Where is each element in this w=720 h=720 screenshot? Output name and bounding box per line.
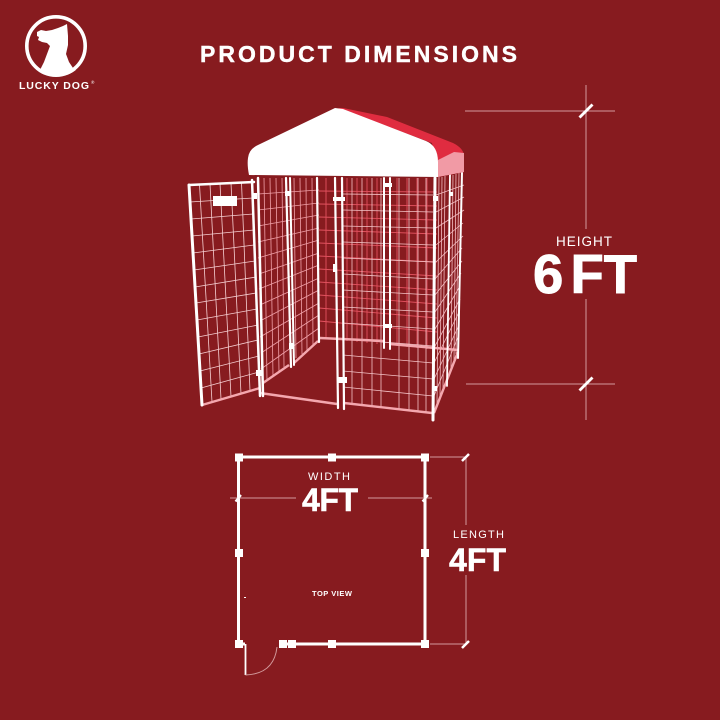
- width guide lines: [230, 497, 432, 499]
- open door mesh: [190, 182, 259, 402]
- width value: 4FT: [302, 482, 358, 518]
- back wall mesh: [319, 178, 437, 349]
- right wall mesh: [434, 173, 464, 405]
- canopy red side: [338, 108, 464, 177]
- title: PRODUCT DIMENSIONS: [200, 41, 517, 67]
- height tick marks: [580, 104, 592, 390]
- height dimension: [465, 85, 637, 420]
- width label: WIDTH: [308, 471, 350, 483]
- logo: Lucky Dog: [19, 17, 95, 92]
- length guide lines: [430, 457, 466, 644]
- canopy white front: [248, 108, 438, 177]
- product illustration: dog kennel: [189, 108, 464, 420]
- base rails: [202, 338, 458, 413]
- top view floor plan: [230, 454, 506, 675]
- front panel mesh: [343, 178, 433, 412]
- floor plan walls: [238, 457, 425, 644]
- icon: dog in circle: [27, 17, 85, 76]
- height label: HEIGHT: [556, 234, 612, 249]
- canopy shaded edge: [438, 152, 464, 177]
- length value: 4FT: [449, 542, 506, 578]
- latches and door sign: [213, 183, 453, 391]
- registered mark: ®: [91, 79, 95, 85]
- top view label: TOP VIEW: [312, 589, 353, 598]
- left wall mesh: [258, 178, 319, 381]
- length label: LENGTH: [453, 529, 504, 541]
- logo wordmark: LUCKY DOG: [19, 80, 89, 92]
- height value: 6 FT: [533, 244, 637, 305]
- door swing: [246, 644, 277, 675]
- floor plan posts: [235, 454, 429, 648]
- length tick marks: [462, 454, 469, 648]
- height guide lines: [465, 85, 615, 420]
- frame posts: [189, 172, 462, 420]
- width tick marks: [236, 495, 428, 502]
